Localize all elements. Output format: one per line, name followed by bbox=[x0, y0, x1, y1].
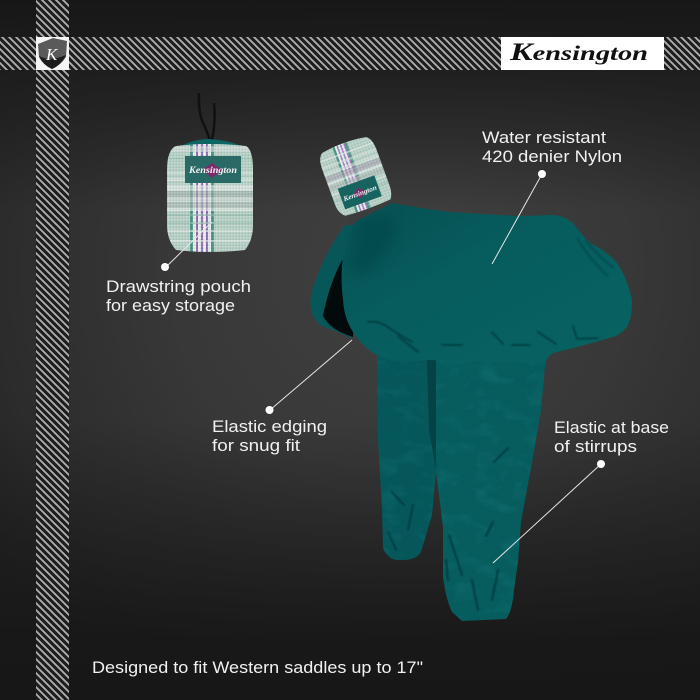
rear stirrup leg bbox=[377, 355, 436, 560]
footer note: Designed to fit Western saddles up to 17" bbox=[92, 658, 423, 677]
saddle top body bbox=[342, 203, 632, 363]
dark inner opening bbox=[323, 260, 354, 337]
drawstring pouch bbox=[165, 93, 255, 254]
callout: elastic at base of stirrups bbox=[493, 418, 669, 563]
icon: K shield logo: K bbox=[45, 45, 59, 64]
callout: drawstring pouch: for easy storage bbox=[106, 296, 235, 315]
pouch plaid body bbox=[165, 142, 255, 254]
callout: drawstring pouch bbox=[106, 222, 251, 315]
callout: water resistant nylon: Water resistant bbox=[482, 128, 606, 147]
callout: elastic at base of stirrups: of stirrups bbox=[554, 437, 637, 456]
front stirrup leg bbox=[427, 355, 546, 621]
icon: K shield logo bbox=[36, 37, 69, 70]
body shading bbox=[350, 216, 398, 275]
left skirt flap bbox=[310, 225, 372, 338]
gathered elastic wrinkles bbox=[368, 322, 598, 352]
attached pouch plaid body bbox=[320, 137, 392, 216]
attached pouch label: Kensington bbox=[341, 184, 378, 203]
callout: elastic edging: Elastic edging bbox=[212, 417, 327, 436]
drawstring cord bbox=[199, 93, 215, 140]
callout: elastic edging: for snug fit bbox=[212, 436, 300, 455]
pouch label: Kensington bbox=[188, 166, 237, 176]
callout: water resistant nylon: 420 denier Nylon bbox=[482, 147, 622, 166]
callout: drawstring pouch: Drawstring pouch bbox=[106, 277, 251, 296]
callout: elastic at base of stirrups: Elastic at base bbox=[554, 418, 669, 437]
attached stuff pouch bbox=[320, 137, 392, 216]
callout: elastic edging bbox=[212, 340, 352, 455]
vertical stripe band bbox=[36, 0, 69, 700]
brand logo: Kensington bbox=[501, 37, 664, 70]
brand logo: Kensington: K ensington bbox=[509, 39, 648, 66]
callout: water resistant nylon bbox=[482, 128, 622, 264]
pouch gathered top bbox=[174, 139, 249, 150]
header stripe band bbox=[0, 37, 700, 70]
leg wrinkles bbox=[382, 360, 538, 611]
pouch label bbox=[185, 156, 241, 183]
saddle cover bbox=[310, 203, 632, 630]
